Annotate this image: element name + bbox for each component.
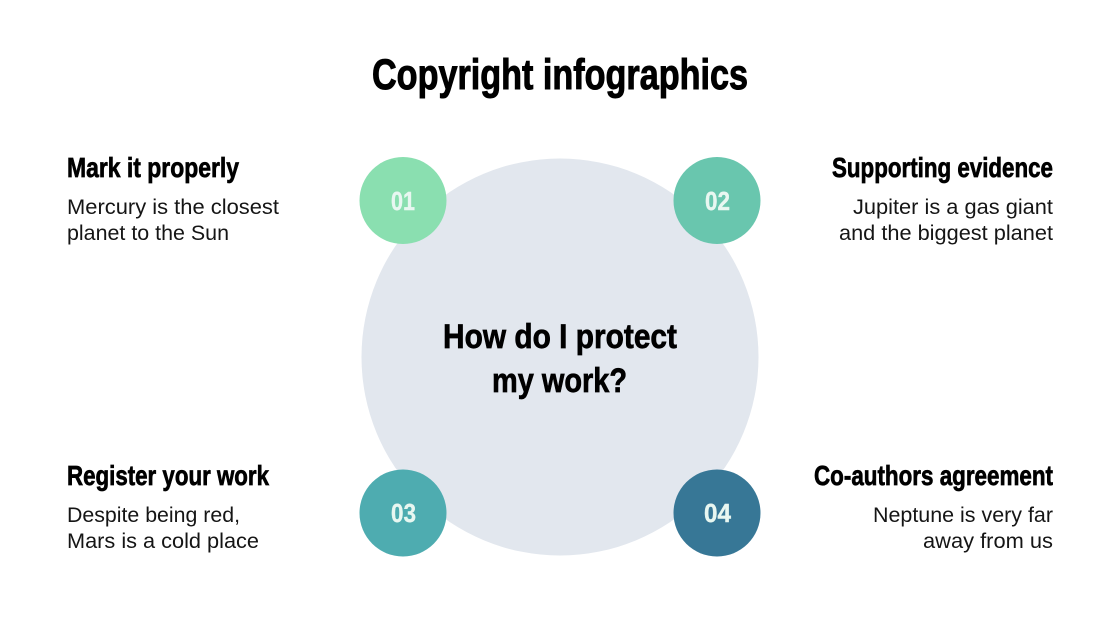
step 03 badge: 03 bbox=[391, 498, 416, 528]
text block: register your work: Despite being red, bbox=[67, 503, 240, 527]
central circle panel bbox=[362, 158, 758, 556]
text block: register your work: Mars is a cold place bbox=[67, 529, 259, 553]
text block: mark it properly: Mercury is the closest bbox=[67, 195, 279, 219]
text block: mark it properly: planet to the Sun bbox=[67, 221, 229, 245]
text block: mark it properly bbox=[67, 152, 279, 245]
central question: How do I protect bbox=[443, 318, 677, 356]
central question bbox=[443, 318, 677, 400]
text block: co-authors agreement: away from us bbox=[923, 529, 1053, 553]
title: Copyright infographics bbox=[372, 51, 748, 99]
step 01 badge: 01 bbox=[391, 186, 415, 216]
text block: register your work: Register your work bbox=[67, 460, 269, 491]
text block: co-authors agreement: Co-authors agreement bbox=[814, 460, 1053, 491]
step 02 badge bbox=[674, 157, 760, 244]
step 04 badge: 04 bbox=[704, 498, 732, 528]
step 03 badge bbox=[360, 470, 446, 556]
text block: supporting evidence bbox=[832, 152, 1053, 245]
text block: supporting evidence: and the biggest planet bbox=[839, 221, 1053, 245]
text block: mark it properly: Mark it properly bbox=[67, 152, 239, 183]
text block: co-authors agreement: Neptune is very far bbox=[873, 503, 1053, 527]
text block: supporting evidence: Supporting evidence bbox=[832, 152, 1053, 183]
step 04 badge bbox=[674, 470, 760, 556]
text block: supporting evidence: Jupiter is a gas giant bbox=[853, 195, 1053, 219]
step 02 badge: 02 bbox=[705, 186, 730, 216]
central question: my work? bbox=[492, 362, 627, 400]
step 01 badge bbox=[360, 157, 446, 244]
text block: co-authors agreement bbox=[814, 460, 1053, 553]
text block: register your work bbox=[67, 460, 269, 553]
